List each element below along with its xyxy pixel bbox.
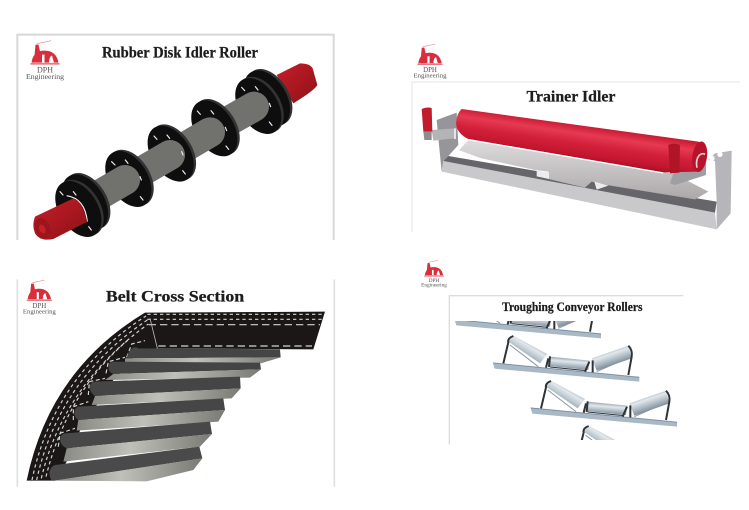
logo: DPH bbox=[37, 66, 53, 75]
white ring bbox=[67, 196, 87, 222]
panel: troughing conveyor rollers bbox=[421, 260, 715, 472]
bolts bbox=[60, 87, 272, 230]
roller illustration bbox=[32, 61, 317, 245]
disk assembly left bbox=[55, 173, 110, 237]
heading: Trainer Idler bbox=[526, 89, 616, 106]
logo: DPH bbox=[423, 67, 437, 74]
disk assembly right bbox=[235, 69, 292, 134]
right red end bbox=[277, 63, 317, 103]
belt cord dashes bbox=[32, 314, 323, 480]
roller sets bbox=[454, 292, 715, 472]
belt illustration bbox=[27, 312, 325, 481]
logo: DPH bbox=[429, 278, 440, 284]
logo: Engineering bbox=[26, 72, 64, 81]
disk 3 bbox=[148, 124, 196, 182]
logo: DPH bbox=[32, 303, 46, 310]
heading: Belt Cross Section bbox=[106, 289, 245, 306]
logo: Engineering bbox=[23, 308, 57, 315]
roller end bbox=[690, 140, 709, 173]
logo: Engineering bbox=[414, 72, 447, 79]
heading: Troughing Conveyor Rollers bbox=[502, 300, 643, 314]
panel borders bbox=[17, 279, 334, 487]
logo bbox=[26, 41, 64, 81]
logo bbox=[23, 280, 57, 315]
heading: Rubber Disk Idler Roller bbox=[102, 44, 258, 61]
left red end bbox=[33, 198, 87, 240]
logo bbox=[414, 44, 447, 79]
belt teeth bbox=[127, 347, 281, 358]
red roller bbox=[456, 109, 707, 172]
panel: trainer idler bbox=[412, 44, 740, 232]
panel: belt cross section bbox=[17, 279, 334, 487]
left guide roller bbox=[422, 108, 432, 140]
idler frame bbox=[432, 113, 732, 229]
disk 4 bbox=[191, 99, 240, 156]
panel border bbox=[17, 35, 334, 240]
right guide roller bbox=[668, 144, 680, 173]
disk 2 bbox=[105, 150, 154, 207]
logo bbox=[421, 260, 447, 288]
panel border bbox=[449, 296, 683, 444]
panel border bbox=[412, 82, 740, 232]
logo: Engineering bbox=[421, 282, 447, 288]
panel: rubber disk idler roller bbox=[17, 35, 334, 245]
